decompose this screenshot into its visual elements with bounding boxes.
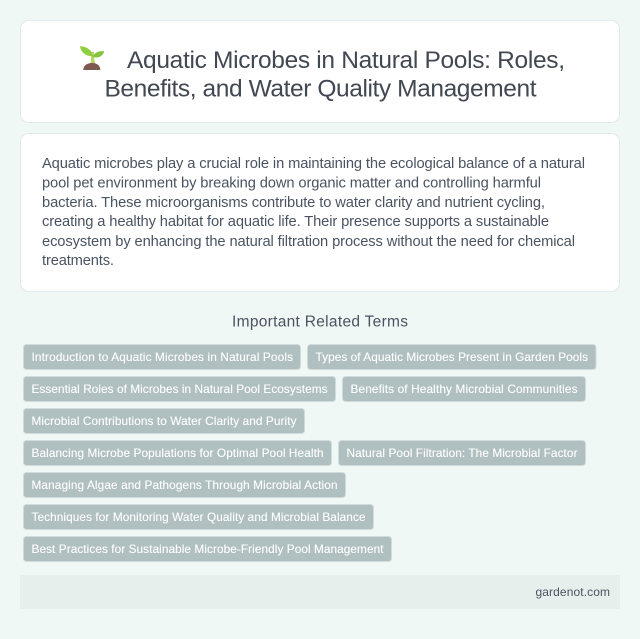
- description text: treatments.: [42, 253, 114, 269]
- title: [104, 47, 565, 102]
- panel: description: [20, 134, 620, 292]
- tag: introduction: Introduction to Aquatic Microbes in Natural Pools: [32, 350, 293, 364]
- tag: benefits: [342, 376, 586, 402]
- tags: related terms: [24, 344, 596, 562]
- description text: ecosystem by enhancing the natural filtration process without the need for chemical: [42, 234, 575, 250]
- tag: best practices: [24, 536, 392, 562]
- tag: contributions: [24, 408, 304, 434]
- tag: monitoring: Techniques for Monitoring Water Quality and Microbial Balance: [32, 510, 366, 524]
- footer: [20, 575, 620, 609]
- tag: types: [308, 344, 596, 370]
- tag: contributions: Microbial Contributions to Water Clarity and Purity: [32, 414, 297, 428]
- description text: creating a healthy habitat for aquatic life. Their presence supports a sustainable: [42, 214, 549, 230]
- icon: sprout: [80, 46, 104, 70]
- tag: introduction: [24, 344, 300, 370]
- footer source: gardenot.com: [536, 585, 610, 599]
- tag: essential roles: [24, 376, 336, 402]
- tag: types: Types of Aquatic Microbes Present in Garden Pools: [316, 350, 588, 364]
- tag: monitoring: [24, 504, 374, 530]
- tag: essential roles: Essential Roles of Microbes in Natural Pool Ecosystems: [32, 382, 328, 396]
- tag: best practices: Best Practices for Sustainable Microbe-Friendly Pool Management: [32, 542, 384, 556]
- tag: filtration: [338, 440, 586, 466]
- panel: title card: [20, 20, 620, 122]
- heading: related terms: Important Related Terms: [232, 314, 408, 330]
- title: Aquatic Microbes in Natural Pools: Roles,: [127, 47, 565, 74]
- tag: algae: [24, 472, 346, 498]
- description text: pool pet environment by breaking down organic matter and controlling harmful: [42, 176, 541, 192]
- tag: filtration: Natural Pool Filtration: The Microbial Factor: [346, 446, 578, 460]
- tag: benefits: Benefits of Healthy Microbial Communities: [350, 382, 578, 396]
- description text: [42, 156, 585, 269]
- description text: Aquatic microbes play a crucial role in maintaining the ecological balance of a natural: [42, 156, 585, 172]
- title: Benefits, and Water Quality Management: [104, 76, 537, 102]
- tag: balancing: [24, 440, 332, 466]
- tag: algae: Managing Algae and Pathogens Through Microbial Action: [32, 478, 338, 492]
- description text: bacteria. These microorganisms contribute to water clarity and nutrient cycling,: [42, 195, 545, 211]
- tag: balancing: Balancing Microbe Populations for Optimal Pool Health: [32, 446, 324, 460]
